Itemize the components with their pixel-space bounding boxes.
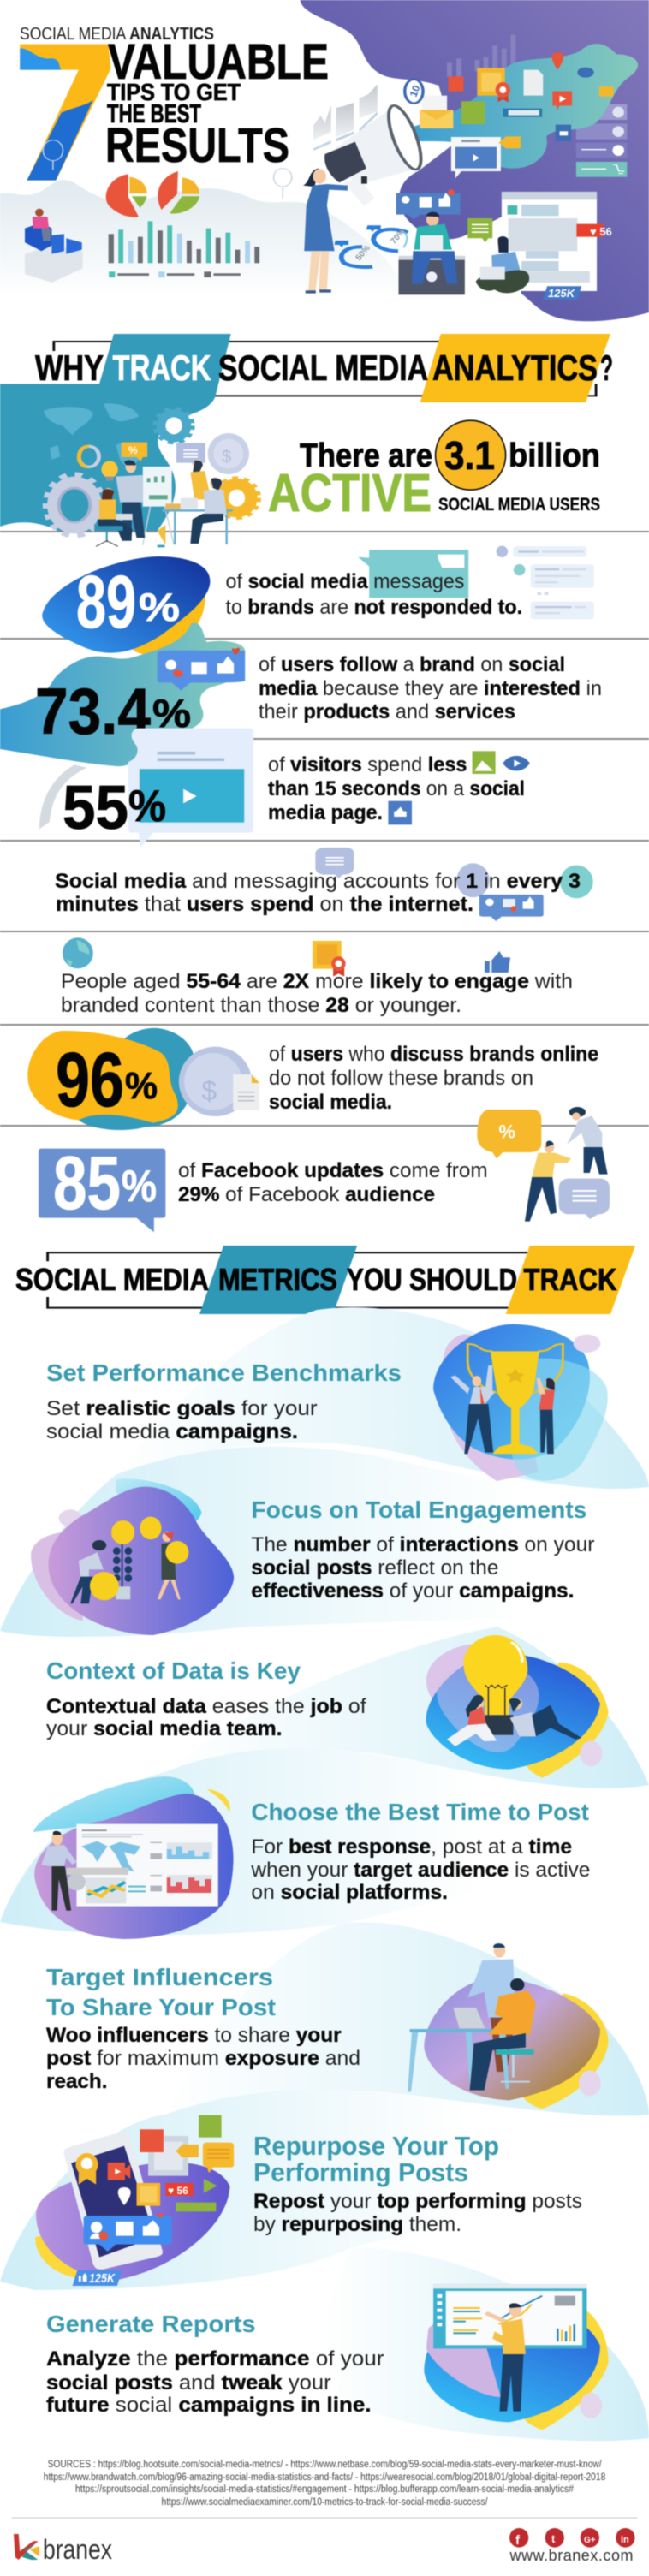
donut bbox=[79, 446, 99, 467]
source line three: https://sproutsocial.com/insights/social-media-statistics/#engagement - https://blog.bufferapp.com/learn-social-media-analytics# bbox=[75, 2484, 575, 2495]
tip text bbox=[253, 2190, 582, 2236]
reach count: 125K bbox=[548, 287, 576, 300]
line two: social media campaigns. bbox=[46, 1420, 298, 1443]
pie chart right bbox=[158, 171, 199, 214]
music note bbox=[204, 2179, 217, 2193]
dashboard screen bbox=[66, 1824, 218, 1907]
timer label: 10 bbox=[408, 83, 423, 98]
megaphone bbox=[324, 104, 427, 206]
phone body bbox=[64, 2132, 163, 2270]
tip heading bbox=[46, 1964, 276, 2020]
stat: 1 in every 3 minutes bbox=[55, 848, 593, 921]
yellow band bbox=[420, 334, 610, 402]
tip heading: Context of Data is Key bbox=[46, 1657, 301, 1684]
tip 4 bbox=[33, 1776, 590, 1939]
likes: ♥ 56 bbox=[168, 2185, 188, 2197]
footer bbox=[14, 2528, 635, 2565]
purple blob bbox=[300, 0, 649, 321]
logo mark bbox=[14, 2534, 39, 2560]
pie chart left bbox=[106, 174, 147, 217]
line one: Contextual data eases the job of bbox=[46, 1695, 366, 1718]
question mark: ? bbox=[600, 348, 613, 388]
gray area charts bbox=[313, 84, 378, 140]
star tag bbox=[498, 136, 521, 148]
line two: branded content than those 28 or younger. bbox=[61, 994, 461, 1017]
teal splash bbox=[406, 44, 638, 169]
tip 7 bbox=[46, 2284, 609, 2430]
world map bbox=[44, 403, 139, 467]
why: WHY bbox=[35, 348, 104, 388]
metrics: METRICS bbox=[218, 1262, 337, 1297]
statement bbox=[226, 570, 522, 619]
team illustration bbox=[44, 403, 259, 547]
tip text bbox=[46, 2024, 360, 2093]
line three: effectiveness of your campaigns. bbox=[251, 1580, 574, 1603]
dashboard illustration bbox=[33, 1776, 234, 1939]
teal gear bbox=[155, 408, 193, 443]
logo word: branex bbox=[43, 2534, 112, 2565]
wave backgrounds bbox=[0, 1307, 649, 2441]
there are: There are bbox=[300, 437, 432, 474]
blobs and coin bbox=[27, 1028, 259, 1130]
hero small labels bbox=[354, 83, 612, 300]
table bbox=[162, 509, 233, 544]
analytics: ANALYTICS bbox=[432, 348, 598, 388]
like count: ♥ 56 bbox=[590, 225, 612, 238]
line two: than 15 seconds on a social bbox=[268, 777, 525, 800]
line one: of users who discuss brands online bbox=[269, 1043, 598, 1066]
donut accent bbox=[79, 446, 89, 467]
faded bars bbox=[447, 35, 515, 77]
track: TRACK bbox=[113, 348, 211, 388]
you should: YOU SHOULD bbox=[347, 1262, 517, 1297]
hero title bbox=[20, 25, 329, 181]
line one: of Facebook updates come from bbox=[178, 1159, 488, 1182]
tip heading: Set Performance Benchmarks bbox=[46, 1359, 402, 1386]
man bbox=[525, 1141, 571, 1222]
light bulb bbox=[101, 461, 118, 481]
line two: do not follow these brands on bbox=[269, 1067, 533, 1090]
tip 1 bbox=[46, 1324, 608, 1481]
social bubble bbox=[396, 189, 461, 220]
envelope bbox=[420, 96, 453, 128]
figure: % bbox=[152, 691, 191, 735]
picture and badge icons bbox=[449, 52, 613, 141]
standing man bbox=[467, 1943, 515, 2072]
headline line 2: TIPS TO GET bbox=[107, 79, 241, 105]
line one: The number of interactions on your bbox=[251, 1533, 594, 1556]
headline line 4: RESULTS bbox=[105, 118, 289, 173]
heading line two: Performing Posts bbox=[253, 2157, 468, 2187]
callout shape bbox=[39, 1149, 165, 1232]
bar chart bbox=[109, 221, 259, 263]
line two: social posts reflect on the bbox=[251, 1556, 498, 1580]
percent bubble: % bbox=[128, 444, 138, 456]
trophy bbox=[467, 1344, 563, 1454]
timer ring bbox=[405, 80, 423, 104]
percent bubble bbox=[122, 443, 147, 461]
chart ticks bbox=[313, 111, 378, 151]
reclining man bbox=[509, 1698, 581, 1740]
figure: 85 bbox=[53, 1140, 121, 1225]
chat decor bbox=[497, 546, 594, 619]
dividers bbox=[0, 531, 649, 1127]
pin circle right bbox=[274, 169, 292, 199]
tip text bbox=[46, 2347, 384, 2417]
line three: on social platforms. bbox=[251, 1881, 448, 1904]
number: 3.1 bbox=[444, 433, 495, 478]
seated man bbox=[470, 1978, 536, 2091]
tip text bbox=[46, 1695, 366, 1740]
line one: For best response, post at a time bbox=[251, 1835, 572, 1859]
sitting woman bbox=[447, 1695, 497, 1746]
report board bbox=[433, 2284, 586, 2348]
woman with megaphone bbox=[303, 169, 348, 294]
percent 50: 50% bbox=[354, 243, 372, 263]
laptop man on screen bbox=[399, 212, 465, 294]
linkedin: in bbox=[621, 2535, 629, 2545]
red like tag bbox=[165, 2183, 194, 2196]
line one: Social media and messaging accounts for 1 in every 3 bbox=[55, 870, 581, 893]
teal band and blob bbox=[0, 334, 231, 531]
line three: social media. bbox=[269, 1091, 392, 1114]
bulb bbox=[463, 1635, 527, 1735]
tip heading: Focus on Total Engagements bbox=[251, 1496, 586, 1523]
map pin bbox=[118, 2187, 131, 2205]
headline line 3: THE BEST bbox=[107, 98, 201, 128]
video card bbox=[39, 729, 530, 847]
statement bbox=[259, 653, 602, 723]
tip text bbox=[251, 1533, 594, 1603]
coins illustration bbox=[31, 1478, 234, 1635]
icons bbox=[63, 937, 510, 977]
icons bbox=[315, 848, 593, 921]
trophy illustration bbox=[433, 1324, 608, 1481]
statement bbox=[178, 1159, 488, 1206]
lower panel bbox=[66, 1868, 146, 1903]
figure: 96 bbox=[56, 1038, 124, 1123]
stat: 55 percent bbox=[39, 729, 530, 847]
heading frame and bands bbox=[48, 1246, 635, 1314]
heading: why track bbox=[0, 334, 613, 531]
map bbox=[81, 1841, 140, 1872]
video icon bbox=[108, 2163, 130, 2180]
yellow picture bbox=[137, 2183, 160, 2206]
line three: reach. bbox=[46, 2070, 108, 2093]
seated man bbox=[476, 236, 529, 293]
icons in text bbox=[388, 751, 530, 824]
stat: 96 percent bbox=[27, 1028, 598, 1130]
tip 6 bbox=[35, 2115, 582, 2286]
reach tag bbox=[73, 2270, 122, 2286]
heading line one: Repurpose Your Top bbox=[253, 2131, 499, 2161]
chart legend bbox=[109, 271, 241, 277]
line two: your social media team. bbox=[46, 1717, 283, 1740]
track: TRACK bbox=[524, 1262, 616, 1297]
line one: of visitors spend less bbox=[268, 753, 467, 776]
seated bearded man bbox=[158, 478, 227, 547]
tip 5 bbox=[46, 1943, 609, 2109]
line one: Woo influencers to share your bbox=[46, 2024, 342, 2047]
woman cheering bbox=[536, 1378, 555, 1454]
line one: People aged 55-64 are 2X more likely to engage with bbox=[61, 970, 573, 993]
flip chart bbox=[143, 467, 174, 545]
floating picture cards bbox=[140, 2115, 234, 2176]
donut 70 bbox=[373, 229, 408, 251]
stat: 85 percent bbox=[39, 1107, 610, 1232]
google plus: G+ bbox=[584, 2536, 596, 2545]
billion: billion bbox=[509, 437, 600, 474]
line three: their products and services bbox=[259, 700, 515, 723]
blob bbox=[0, 623, 245, 766]
line two: 29% of Facebook audience bbox=[178, 1183, 435, 1206]
website: www.branex.com bbox=[509, 2547, 634, 2564]
line three: media page. bbox=[268, 801, 383, 824]
lilac chat bubble bbox=[559, 1179, 610, 1219]
twitter: t bbox=[551, 2532, 556, 2545]
heading: social media metrics bbox=[15, 1246, 635, 1314]
heading frame and bands bbox=[0, 334, 610, 531]
blue 125K tag bbox=[543, 286, 581, 300]
bulb illustration bbox=[426, 1635, 609, 1778]
yellow percent bubble bbox=[477, 1110, 541, 1158]
man with coin bbox=[70, 1540, 119, 1603]
tip heading: Generate Reports bbox=[46, 2311, 256, 2337]
tip heading bbox=[253, 2131, 499, 2187]
green bar bbox=[176, 2203, 216, 2211]
right check list bbox=[576, 104, 627, 177]
platform with person bbox=[25, 209, 83, 283]
phone illustration bbox=[35, 2115, 234, 2286]
tip heading: Choose the Best Time to Post bbox=[251, 1799, 589, 1825]
line two: post for maximum exposure and bbox=[46, 2047, 360, 2070]
desk illustration bbox=[408, 1943, 609, 2109]
active: ACTIVE bbox=[268, 464, 432, 523]
stat: 3.1 billion bbox=[268, 420, 600, 523]
presenter bbox=[485, 2303, 526, 2412]
figure: % bbox=[139, 585, 180, 629]
seated woman bbox=[95, 488, 133, 546]
social media: SOCIAL MEDIA bbox=[15, 1262, 209, 1297]
facebook: f bbox=[515, 2533, 521, 2548]
line two: media because they are interested in bbox=[259, 677, 602, 700]
line two: by repurposing them. bbox=[253, 2213, 461, 2236]
numeral 7 bbox=[20, 45, 111, 181]
line one: Repost your top performing posts bbox=[253, 2190, 582, 2213]
tip text bbox=[46, 1397, 318, 1443]
reach value: 125K bbox=[89, 2271, 116, 2286]
figure: 55 bbox=[63, 774, 128, 842]
books and laptop bbox=[165, 498, 198, 509]
social media users: SOCIAL MEDIA USERS bbox=[438, 495, 600, 515]
kicker: SOCIAL MEDIA ANALYTICS bbox=[20, 25, 214, 44]
gray gear bbox=[46, 474, 103, 536]
blobs bbox=[42, 546, 594, 655]
green comment bubble bbox=[467, 218, 492, 242]
headline line 1: VALUABLE bbox=[108, 34, 329, 90]
highlight circle bbox=[436, 420, 506, 490]
yellow woman bbox=[190, 460, 211, 499]
report illustration bbox=[424, 2284, 609, 2430]
branex logo bbox=[14, 2534, 112, 2565]
sources bbox=[44, 2460, 605, 2508]
figure: % bbox=[125, 1065, 158, 1107]
percent 70: 70% bbox=[389, 227, 408, 247]
blue bars bbox=[167, 1842, 212, 1859]
hero illustration bbox=[0, 0, 649, 321]
standing man bbox=[116, 461, 145, 541]
line two: when your target audience is active bbox=[250, 1859, 590, 1882]
like bubble bbox=[158, 648, 245, 691]
line one: of social media messages bbox=[226, 570, 464, 593]
line one: of users follow a brand on social bbox=[259, 653, 565, 676]
social bubble bbox=[84, 2213, 172, 2252]
stat: people aged 55-64 bbox=[61, 937, 573, 1017]
statement bbox=[268, 753, 525, 824]
hills background bbox=[0, 180, 414, 298]
line one: Set realistic goals for your bbox=[46, 1397, 318, 1420]
yellow percent bubble: % bbox=[498, 1121, 515, 1142]
stat: 73.4 percent bbox=[0, 623, 602, 766]
heading line two: To Share Your Post bbox=[46, 1994, 276, 2020]
desk bbox=[408, 2008, 509, 2091]
heading line one: Target Influencers bbox=[46, 1964, 273, 1990]
coin: $ bbox=[222, 448, 231, 467]
line one: Analyze the performance of your bbox=[46, 2347, 384, 2371]
red likes tag bbox=[576, 224, 604, 237]
presenter bbox=[41, 1831, 76, 1911]
gauge tags bbox=[335, 225, 381, 247]
orange gear bbox=[215, 478, 259, 518]
figure: 89 bbox=[76, 561, 136, 644]
video bubble bbox=[451, 137, 501, 178]
coin plant bbox=[111, 1517, 162, 1599]
lilac chat bubble bbox=[176, 443, 205, 467]
source line four: https://www.socialmediaexaminer.com/10-metrics-to-track-for-social-media-success/ bbox=[161, 2497, 488, 2508]
figure: 73.4 bbox=[35, 675, 151, 748]
stat: 89 percent bbox=[42, 546, 594, 655]
blobs and coin: $ bbox=[201, 1075, 217, 1106]
message bubble bbox=[358, 550, 468, 598]
line two: social posts and tweak your bbox=[46, 2371, 331, 2395]
coin bbox=[208, 433, 249, 474]
social media: SOCIAL MEDIA bbox=[218, 348, 428, 388]
line two: minutes that users spend on the internet. bbox=[56, 893, 473, 916]
post page panel bbox=[502, 192, 597, 291]
tip 2 bbox=[31, 1478, 594, 1635]
social icons bbox=[509, 2528, 635, 2548]
tip text bbox=[250, 1835, 590, 1904]
figure: % bbox=[122, 1162, 157, 1211]
statement bbox=[269, 1043, 598, 1114]
red bars bbox=[167, 1875, 212, 1893]
card labels bbox=[89, 2185, 188, 2286]
badge bbox=[75, 2153, 98, 2185]
woman bbox=[567, 1107, 608, 1175]
woman with coin bbox=[158, 1532, 188, 1599]
tip 3 bbox=[46, 1635, 609, 1778]
man cheering bbox=[450, 1365, 495, 1454]
circles bbox=[509, 2528, 635, 2548]
line three: future social campaigns in line. bbox=[46, 2394, 372, 2417]
figure: % bbox=[128, 782, 166, 831]
side text bbox=[150, 1842, 162, 1891]
line two: to brands are not responded to. bbox=[226, 596, 522, 619]
helping people illustration bbox=[477, 1107, 610, 1222]
donut 50 bbox=[342, 247, 372, 267]
